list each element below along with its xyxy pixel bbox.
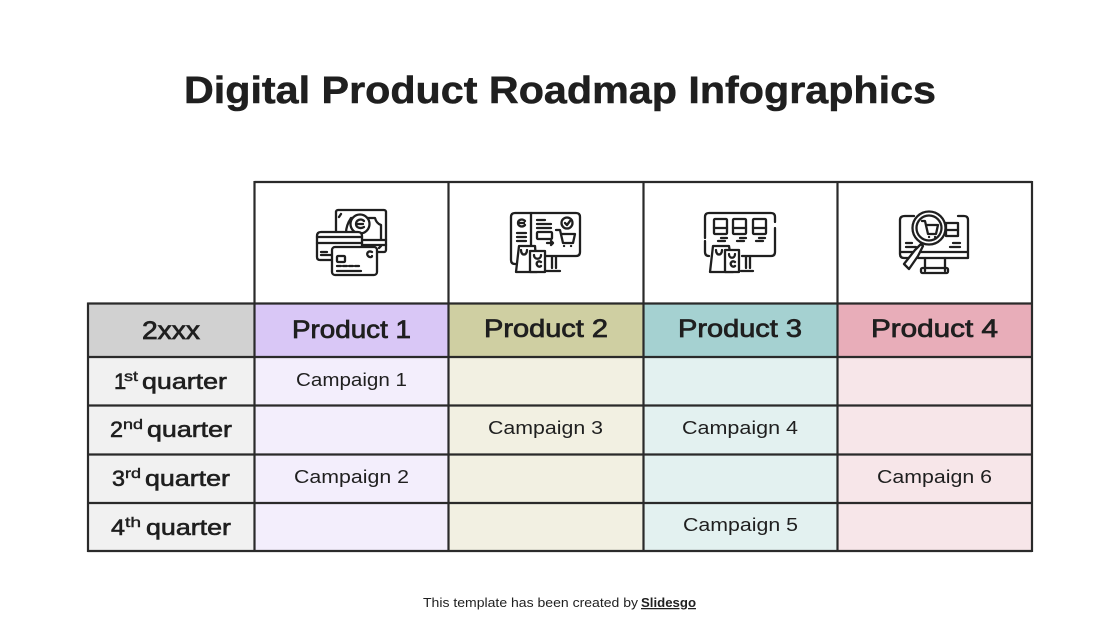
cell: Campaign 3: Campaign 3 — [488, 418, 603, 438]
row label: 2nd quarter: nd — [123, 416, 143, 432]
header: Product 1: Product 1 — [292, 316, 411, 344]
row label: 3rd quarter: quarter — [145, 466, 230, 491]
cell: Campaign 2: Campaign 2 — [294, 467, 409, 487]
cell: Campaign 6: Campaign 6 — [877, 467, 992, 487]
roadmap table — [87, 181, 1032, 552]
cell: Campaign 5: Campaign 5 — [683, 515, 798, 535]
title: Digital Product Roadmap Infographics — [184, 70, 936, 112]
cell: Campaign 1: Campaign 1 — [296, 370, 407, 390]
row label: 4th quarter — [111, 514, 231, 540]
row label: 1st quarter — [114, 368, 227, 394]
header: 2xxx: 2xxx — [142, 317, 201, 345]
row label: 2nd quarter — [110, 416, 232, 442]
row label: 2nd quarter: 2 — [110, 417, 123, 442]
row label: 3rd quarter — [112, 465, 230, 491]
footer credit: This template has been created by — [423, 596, 639, 610]
row label: 1st quarter: st — [124, 368, 138, 384]
cell: Campaign 4: Campaign 4 — [682, 418, 798, 438]
row label: 1st quarter: quarter — [142, 369, 227, 394]
row label: 1st quarter: 1 — [114, 369, 126, 394]
icon: monitor with product grid and bags — [705, 213, 775, 272]
header: Product 3: Product 3 — [678, 315, 802, 343]
icon: storefront monitor with cart and bags — [511, 213, 580, 272]
row label: 3rd quarter: 3 — [112, 466, 125, 491]
footer credit: Slidesgo — [641, 596, 696, 610]
icon: monitor with magnifying glass and cart — [900, 212, 968, 273]
row label: 4th quarter: quarter — [146, 515, 231, 540]
row label: 2nd quarter: quarter — [147, 417, 232, 442]
header: Product 4: Product 4 — [871, 315, 998, 343]
row label: 3rd quarter: rd — [125, 465, 141, 481]
panel: table cell fills — [87, 303, 1032, 551]
row label: 4th quarter: 4 — [111, 515, 125, 540]
row label: 4th quarter: th — [125, 514, 141, 530]
icon: banknote and credit cards — [317, 210, 386, 275]
header: Product 2: Product 2 — [484, 315, 608, 343]
